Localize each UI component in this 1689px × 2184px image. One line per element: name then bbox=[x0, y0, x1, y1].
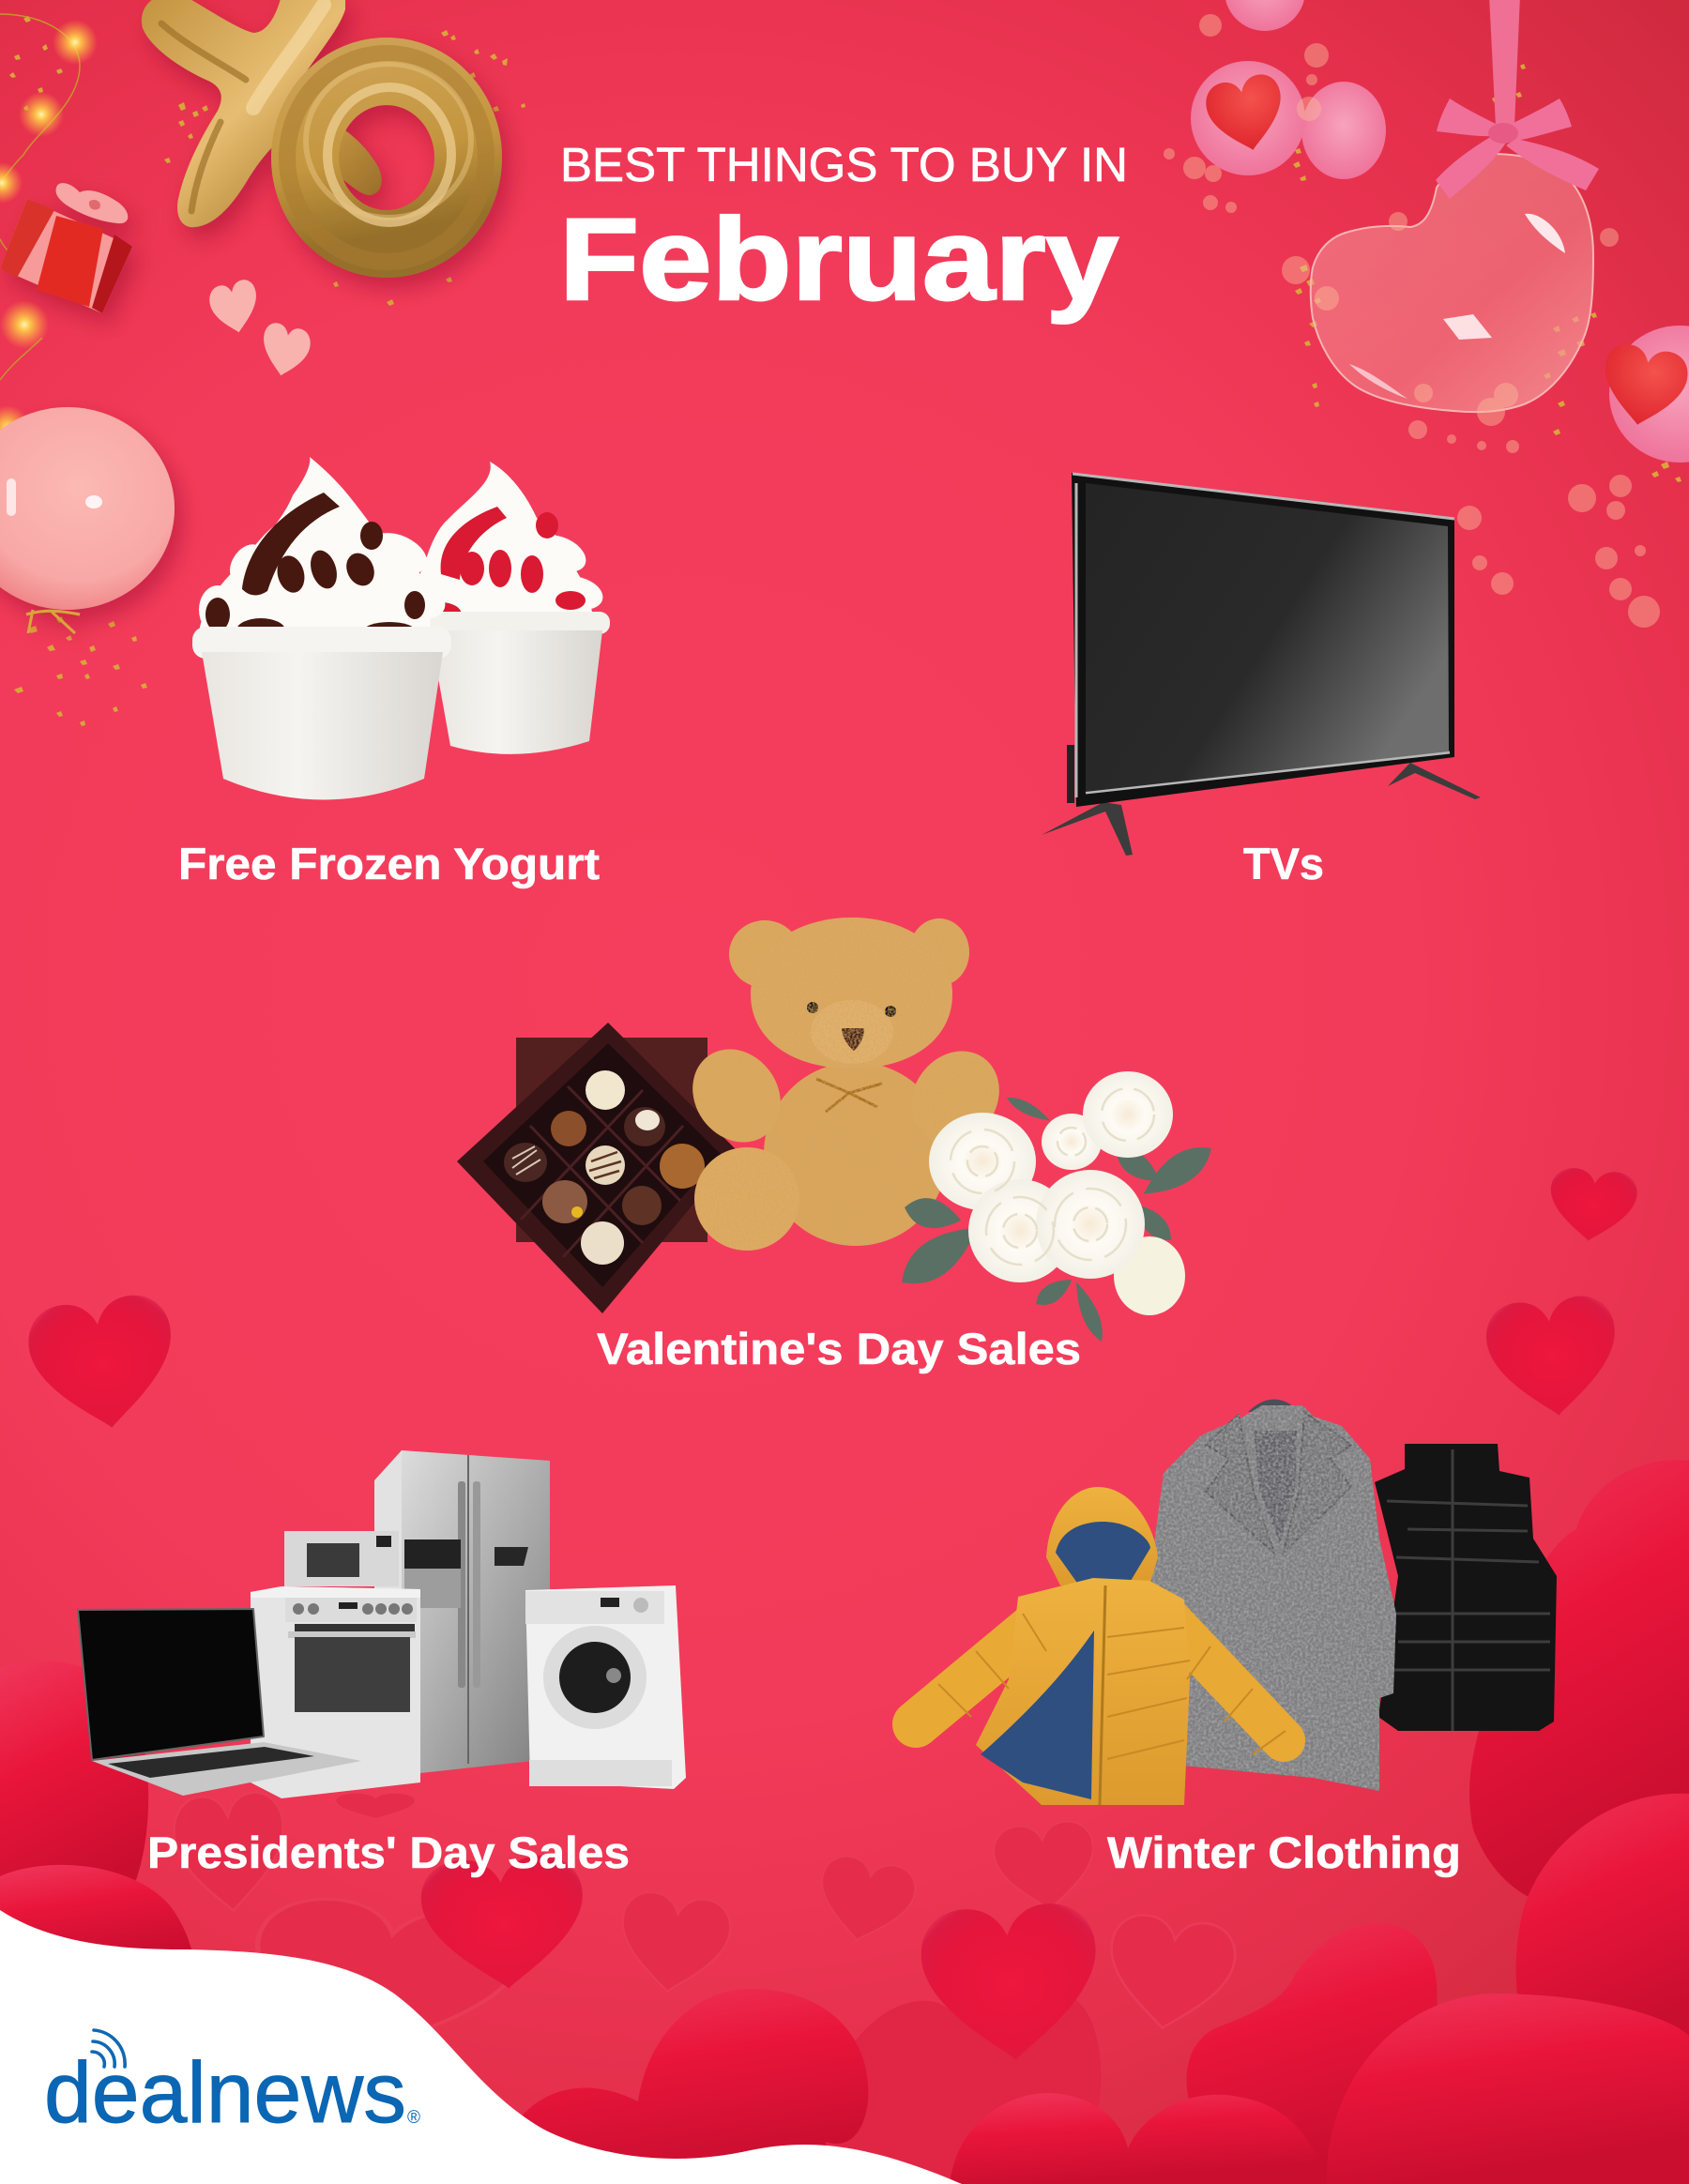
strawberry swirl bbox=[417, 462, 606, 636]
TV stand bbox=[1042, 763, 1481, 856]
logo wordmark: dealnews bbox=[44, 2045, 406, 2141]
refrigerator bbox=[374, 1450, 550, 1773]
white roses bouquet bbox=[891, 1071, 1220, 1344]
TV side buttons bbox=[1067, 745, 1074, 803]
title bbox=[559, 138, 1128, 325]
left yogurt cup bbox=[192, 457, 451, 799]
gift box body bbox=[0, 199, 132, 313]
vest bbox=[1375, 1444, 1557, 1731]
balloon letter X bbox=[142, 0, 382, 227]
right balloon bbox=[1609, 326, 1689, 463]
chocolate box bbox=[457, 1023, 738, 1313]
lower left heart lobe bbox=[0, 1865, 194, 1965]
jacket lining bbox=[981, 1630, 1094, 1799]
decoration: XO gold balloons bbox=[142, 0, 486, 262]
rose leaves bbox=[891, 1093, 1220, 1344]
red heart on balloon bbox=[1202, 70, 1290, 159]
bottom two lobed heart bbox=[950, 2093, 1323, 2184]
yellow puffer jacket bbox=[916, 1487, 1286, 1805]
chocolate box lid bbox=[516, 1038, 708, 1242]
pink balloon second bbox=[1301, 82, 1386, 179]
decoration: pink balloon bbox=[0, 407, 175, 633]
teddy bear bbox=[675, 918, 1017, 1251]
item: valentine's gifts bbox=[457, 918, 1220, 1344]
rose petal lines bbox=[951, 1088, 1154, 1265]
washing machine bbox=[525, 1585, 686, 1789]
heart: upper left bbox=[23, 1291, 183, 1437]
oven bbox=[251, 1586, 420, 1798]
glass heart highlights bbox=[1349, 214, 1565, 399]
item: winter clothing bbox=[916, 1400, 1557, 1805]
hanger bbox=[1248, 1400, 1300, 1412]
right yogurt cup bbox=[413, 462, 610, 754]
chocolate box inner bbox=[483, 1043, 721, 1287]
decoration: gold confetti bbox=[9, 16, 1681, 726]
heart: upper right large bbox=[1483, 1293, 1623, 1422]
red heart on right balloon bbox=[1597, 341, 1689, 432]
glass heart bbox=[1311, 154, 1593, 412]
centre right blob heart bbox=[1187, 1923, 1438, 2184]
sleeves bbox=[916, 1618, 1284, 1740]
solid heart centre right bbox=[918, 1901, 1103, 2066]
right side lower heart bbox=[1516, 1794, 1689, 2064]
large left heart bbox=[0, 1661, 148, 1914]
microwave bbox=[284, 1531, 399, 1586]
icon: signal arcs bbox=[92, 2030, 125, 2067]
label: presidents' day sales: Presidents' Day Sales bbox=[147, 1828, 630, 1877]
item: appliances bbox=[78, 1450, 686, 1798]
registered mark: ® bbox=[407, 2108, 420, 2128]
right side large heart bbox=[1469, 1460, 1689, 1902]
bottom centre large heart bbox=[511, 1989, 868, 2184]
decoration: top right balloons bbox=[1191, 0, 1689, 463]
laptop bbox=[78, 1609, 361, 1796]
heart: upper right small bbox=[1545, 1166, 1639, 1245]
bottom pale heart behind solid one bbox=[807, 1992, 1101, 2184]
label: frozen yogurt: Free Frozen Yogurt bbox=[178, 839, 600, 888]
chocolate swirl bbox=[198, 457, 449, 657]
white wave footer bbox=[0, 1910, 962, 2184]
pink balloon with heart bbox=[1191, 61, 1305, 175]
rose blooms bbox=[929, 1071, 1185, 1315]
bottom right large heart bbox=[1327, 1994, 1689, 2184]
hood bbox=[1046, 1487, 1158, 1585]
faint hearts bbox=[173, 1790, 1240, 2067]
quilting bbox=[938, 1614, 1286, 1759]
TV screen bbox=[1086, 483, 1449, 792]
balloon letter O bbox=[287, 53, 486, 262]
TV bezel highlight bbox=[1073, 474, 1454, 797]
label: winter clothing: Winter Clothing bbox=[1107, 1828, 1461, 1877]
item: frozen yogurt bbox=[192, 457, 610, 799]
TV frame bbox=[1072, 473, 1454, 807]
decoration: gift box bbox=[0, 183, 132, 313]
grey coat bbox=[1149, 1405, 1396, 1791]
background hearts bbox=[0, 1166, 1689, 2184]
decoration: string lights bbox=[0, 14, 98, 450]
label: TVs: TVs bbox=[1243, 839, 1324, 888]
decoration: small pink hearts bbox=[207, 277, 312, 382]
bow bbox=[1436, 99, 1599, 199]
title line 1: BEST THINGS TO BUY IN bbox=[560, 138, 1128, 191]
solid heart centre left bbox=[418, 1853, 589, 1994]
chocolates bbox=[504, 1070, 705, 1265]
chocolate box dividers bbox=[521, 1086, 683, 1257]
logo: dealnews bbox=[44, 2030, 420, 2141]
label: valentine's day sales: Valentine's Day Sales bbox=[597, 1324, 1081, 1373]
ribbon bbox=[1489, 0, 1520, 127]
top balloon bbox=[1225, 0, 1305, 31]
title line 2: February bbox=[559, 195, 1118, 325]
decoration: bokeh lights bbox=[1164, 14, 1660, 628]
gift box bow bbox=[55, 183, 128, 223]
item: TV bbox=[1042, 473, 1481, 856]
jacket body bbox=[976, 1578, 1190, 1805]
